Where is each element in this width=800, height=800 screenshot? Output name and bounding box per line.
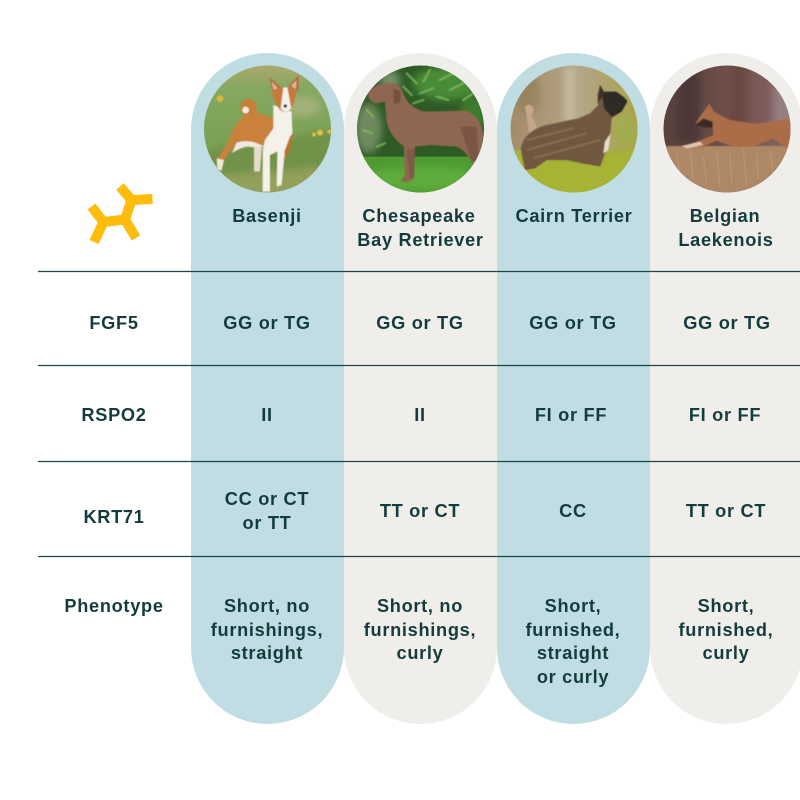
column heading: Chesapeake Bay Retriever: Bay Retriever (357, 230, 484, 250)
row: RSPO2: II (414, 405, 426, 425)
column: Chesapeake Bay Retriever (344, 53, 497, 724)
row: FGF5: GG or TG (683, 313, 771, 333)
row: Phenotype: furnishings, (211, 620, 323, 640)
grass in front of dog (514, 150, 634, 192)
ears (269, 77, 281, 90)
photo: Cairn Terrier (510, 66, 638, 192)
column heading: Basenji: Basenji (232, 206, 302, 226)
hind leg (254, 147, 262, 172)
row: Phenotype: Short, no (377, 596, 463, 616)
row: RSPO2: FI or FF (689, 405, 761, 425)
column: Cairn Terrier (497, 53, 650, 724)
genetics comparison table (38, 53, 800, 724)
row: Phenotype: curly (703, 643, 750, 663)
column heading: Belgian Laekenois: Belgian (690, 206, 760, 226)
row: Phenotype: Short, no (224, 596, 310, 616)
row: RSPO2: FI or FF (535, 405, 607, 425)
row: FGF5: GG or TG (376, 313, 464, 333)
column heading: Cairn Terrier: Cairn Terrier (516, 206, 632, 226)
column heading: Chesapeake Bay Retriever: Chesapeake (362, 206, 476, 226)
row: Phenotype: straight (537, 643, 609, 663)
row: KRT71 (83, 489, 766, 533)
row: FGF5: FGF5 (89, 313, 139, 333)
row: Phenotype: Short, (698, 596, 754, 616)
photo: Belgian Laekenois (664, 66, 790, 192)
tail (240, 99, 257, 116)
row: FGF5 (89, 313, 771, 333)
row: Phenotype: furnished, (679, 620, 773, 640)
white chest and legs (263, 105, 293, 192)
row: Phenotype: or curly (537, 667, 609, 687)
row: FGF5: GG or TG (529, 313, 617, 333)
row: KRT71: CC (559, 501, 587, 521)
row: RSPO2: II (261, 405, 273, 425)
row: RSPO2: RSPO2 (81, 405, 147, 425)
row: KRT71: TT or CT (380, 501, 460, 521)
row: KRT71: CC or CT (225, 489, 309, 509)
column: Belgian Laekenois (650, 53, 800, 724)
row: KRT71: TT or CT (686, 501, 766, 521)
row: KRT71: KRT71 (83, 507, 145, 527)
row: Phenotype (64, 596, 773, 687)
photo: Chesapeake Bay Retriever (357, 66, 484, 192)
column heading: Belgian Laekenois: Laekenois (678, 230, 774, 250)
column heading: Belgian Laekenois (678, 206, 774, 250)
head (272, 87, 296, 112)
row: Phenotype: curly (397, 643, 444, 663)
row: RSPO2 (81, 405, 761, 425)
row: KRT71: or TT (243, 513, 291, 533)
photo: Basenji (204, 66, 331, 192)
row: Phenotype: Phenotype (64, 596, 164, 616)
column: Basenji (191, 53, 344, 724)
row: FGF5: GG or TG (223, 313, 311, 333)
row: Phenotype: furnishings, (364, 620, 476, 640)
row: Phenotype: straight (231, 643, 303, 663)
icon: yellow molecule dog (92, 186, 152, 242)
column heading: Chesapeake Bay Retriever (357, 206, 484, 250)
row: Phenotype: furnished, (526, 620, 620, 640)
row: Phenotype: Short, (545, 596, 601, 616)
row divider lines (38, 272, 800, 556)
